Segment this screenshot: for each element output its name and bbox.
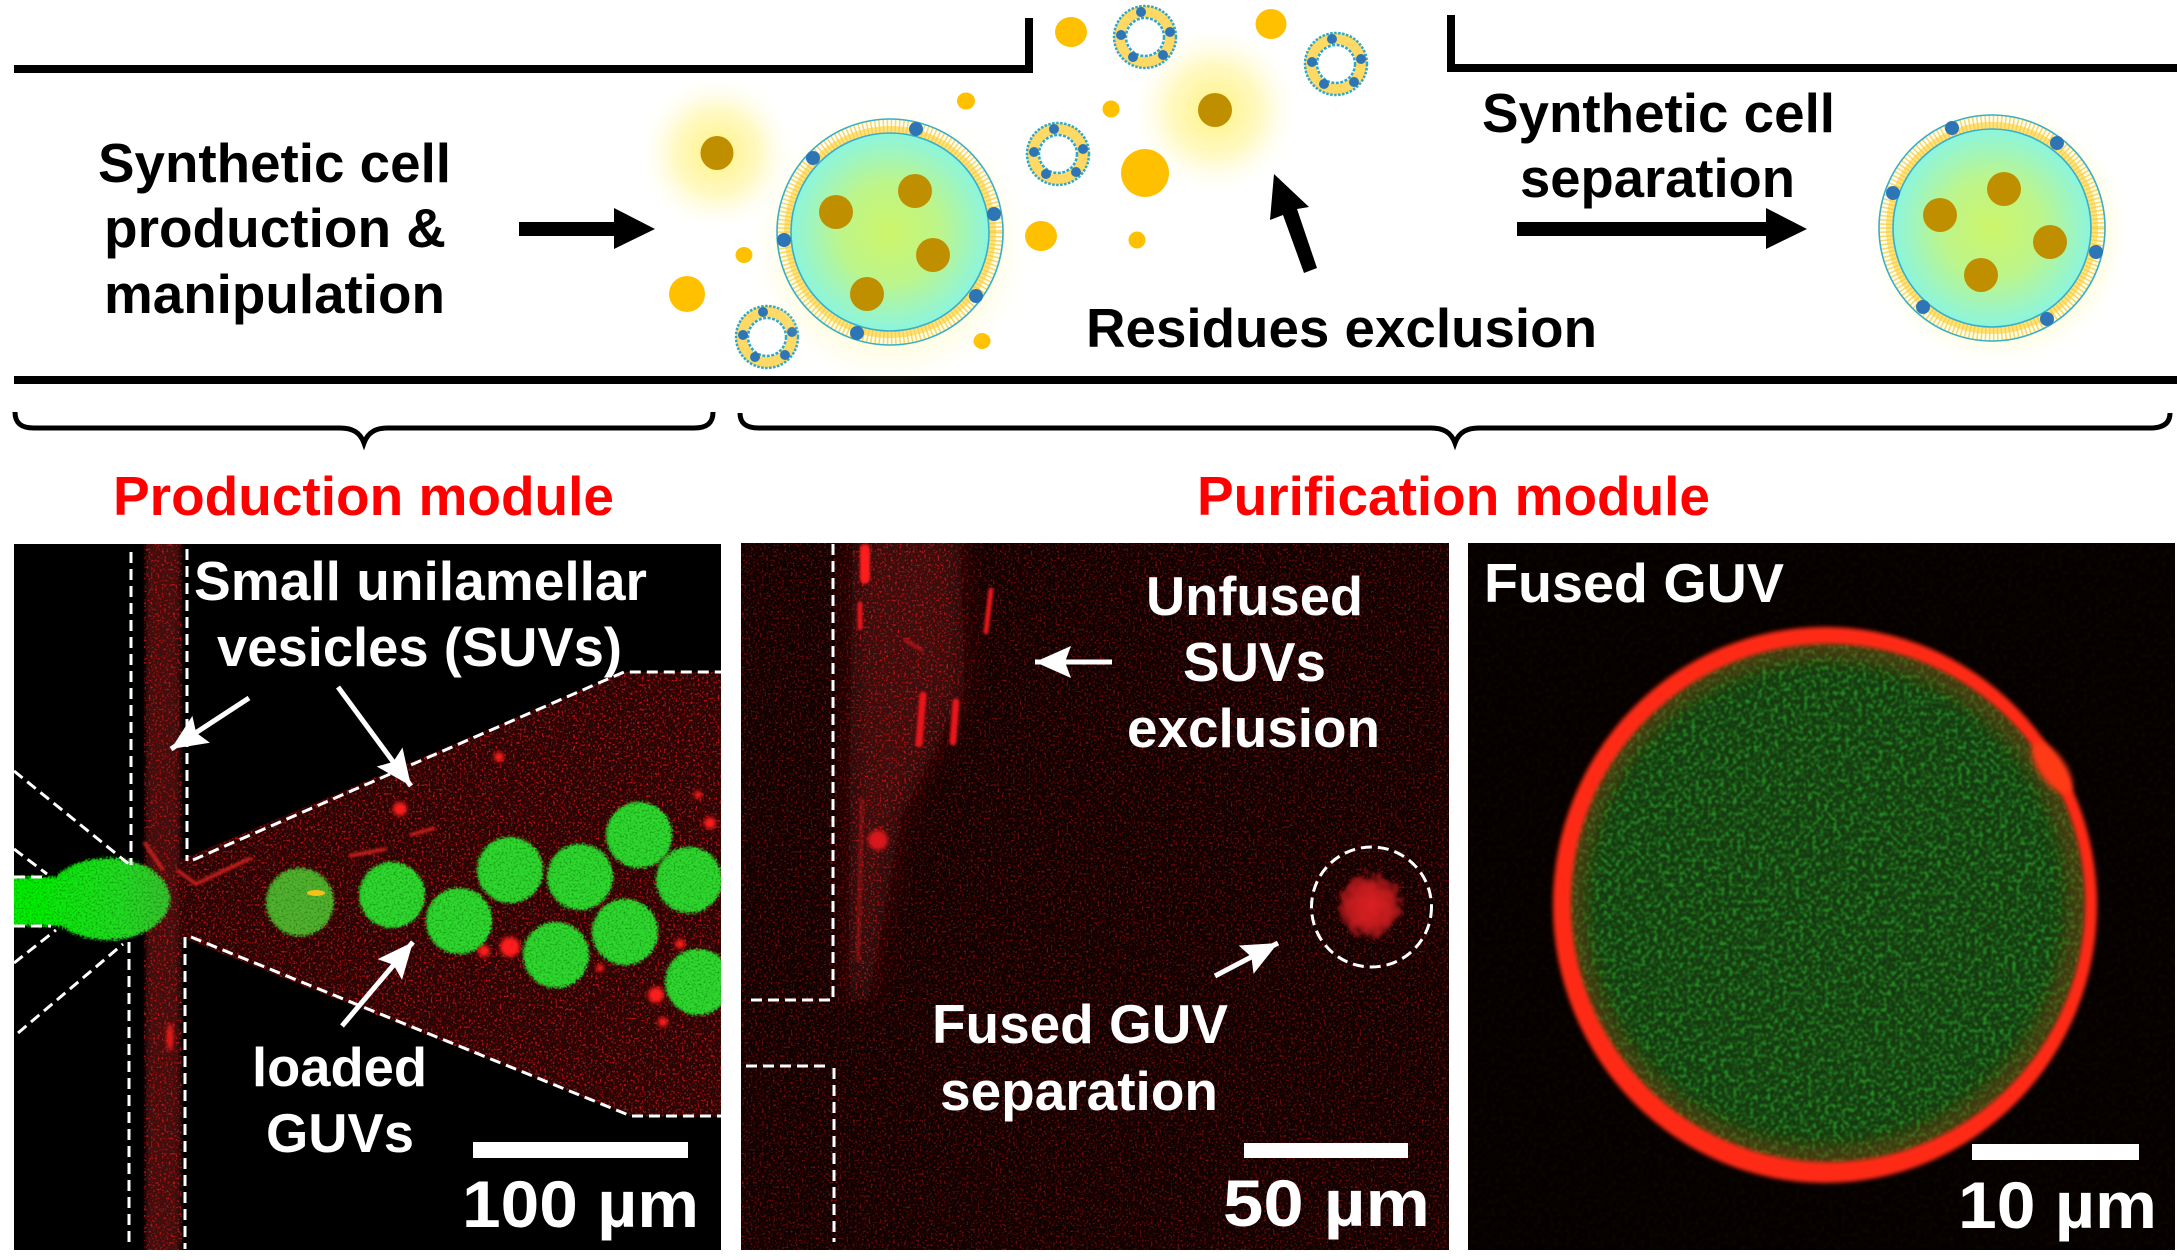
channel outline dashes bbox=[746, 544, 834, 1242]
heading: synthetic cell production and manipulation bbox=[98, 132, 451, 325]
heading: purification module: Purification module bbox=[1197, 465, 1710, 527]
excluded SUV streaks bbox=[834, 543, 996, 1006]
label: synthetic cell separation bbox=[1482, 82, 1835, 209]
label: small unilamellar vesicles: vesicles (SUVs) bbox=[217, 616, 622, 678]
microchannel fluid bbox=[144, 530, 721, 1260]
arrow: separation bbox=[1517, 208, 1807, 249]
label: synthetic cell separation: separation bbox=[1520, 147, 1795, 209]
synthetic cell: production bbox=[774, 119, 1006, 362]
brace: purification module bbox=[740, 413, 2170, 443]
label: loaded GUVs bbox=[256, 1046, 424, 1152]
scale bar: 50 um bbox=[1223, 1143, 1430, 1240]
loaded GUVs bbox=[266, 802, 731, 1015]
arrow: residues exclusion bbox=[1270, 174, 1317, 273]
separated fused GUV bbox=[1312, 847, 1432, 967]
label: synthetic cell separation: Synthetic cell bbox=[1482, 82, 1835, 144]
synthetic cell: purified bbox=[1879, 115, 2114, 350]
label: residues exclusion: Residues exclusion bbox=[1086, 297, 1597, 359]
label: unfused SUVs exclusion bbox=[1129, 576, 1377, 748]
channel outline dashes bbox=[14, 549, 721, 1249]
arrow: production to cell bbox=[519, 208, 655, 249]
heading: synthetic cell production and manipulation: manipulation bbox=[104, 263, 445, 325]
fused GUV sphere bbox=[1553, 627, 2097, 1183]
small vesicles bbox=[736, 6, 1367, 368]
panel: purification micrograph bbox=[741, 530, 1449, 1250]
scale bar: 100 um: 100 µm bbox=[462, 1167, 699, 1241]
brace: production module bbox=[15, 412, 713, 443]
residues scattered around bbox=[641, 9, 1297, 349]
label: unfused SUVs exclusion: SUVs bbox=[1183, 631, 1326, 693]
label: loaded GUVs: loaded bbox=[252, 1036, 427, 1098]
label: unfused SUVs exclusion: Unfused bbox=[1146, 565, 1363, 627]
label: small unilamellar vesicles: Small unilamellar bbox=[194, 550, 647, 612]
label: small unilamellar vesicles bbox=[194, 550, 647, 678]
green droplet stream bbox=[8, 858, 170, 940]
scale bar: 10 um: 10 µm bbox=[1958, 1168, 2157, 1242]
heading: synthetic cell production and manipulation: Synthetic cell bbox=[98, 132, 451, 194]
channel schematic walls bbox=[14, 15, 2177, 384]
heading: production module: Production module bbox=[113, 465, 614, 527]
label: unfused SUVs exclusion: exclusion bbox=[1127, 697, 1380, 759]
label: fused GUV separation bbox=[932, 993, 1228, 1122]
panel: fused GUV micrograph bbox=[1468, 543, 2175, 1250]
annotation arrows bbox=[1035, 662, 1278, 976]
annotation arrows bbox=[171, 687, 413, 1026]
heading: synthetic cell production and manipulation: production & bbox=[104, 197, 446, 259]
label: loaded GUVs: GUVs bbox=[266, 1102, 414, 1164]
label: fused GUV: Fused GUV bbox=[1484, 552, 1784, 614]
label: fused GUV separation: separation bbox=[940, 1060, 1218, 1122]
panel: production module micrograph bbox=[8, 530, 731, 1260]
scale bar: 50 um: 50 µm bbox=[1223, 1166, 1430, 1240]
label: fused GUV separation: Fused GUV bbox=[932, 993, 1228, 1055]
red vesicle debris bbox=[144, 752, 716, 1051]
